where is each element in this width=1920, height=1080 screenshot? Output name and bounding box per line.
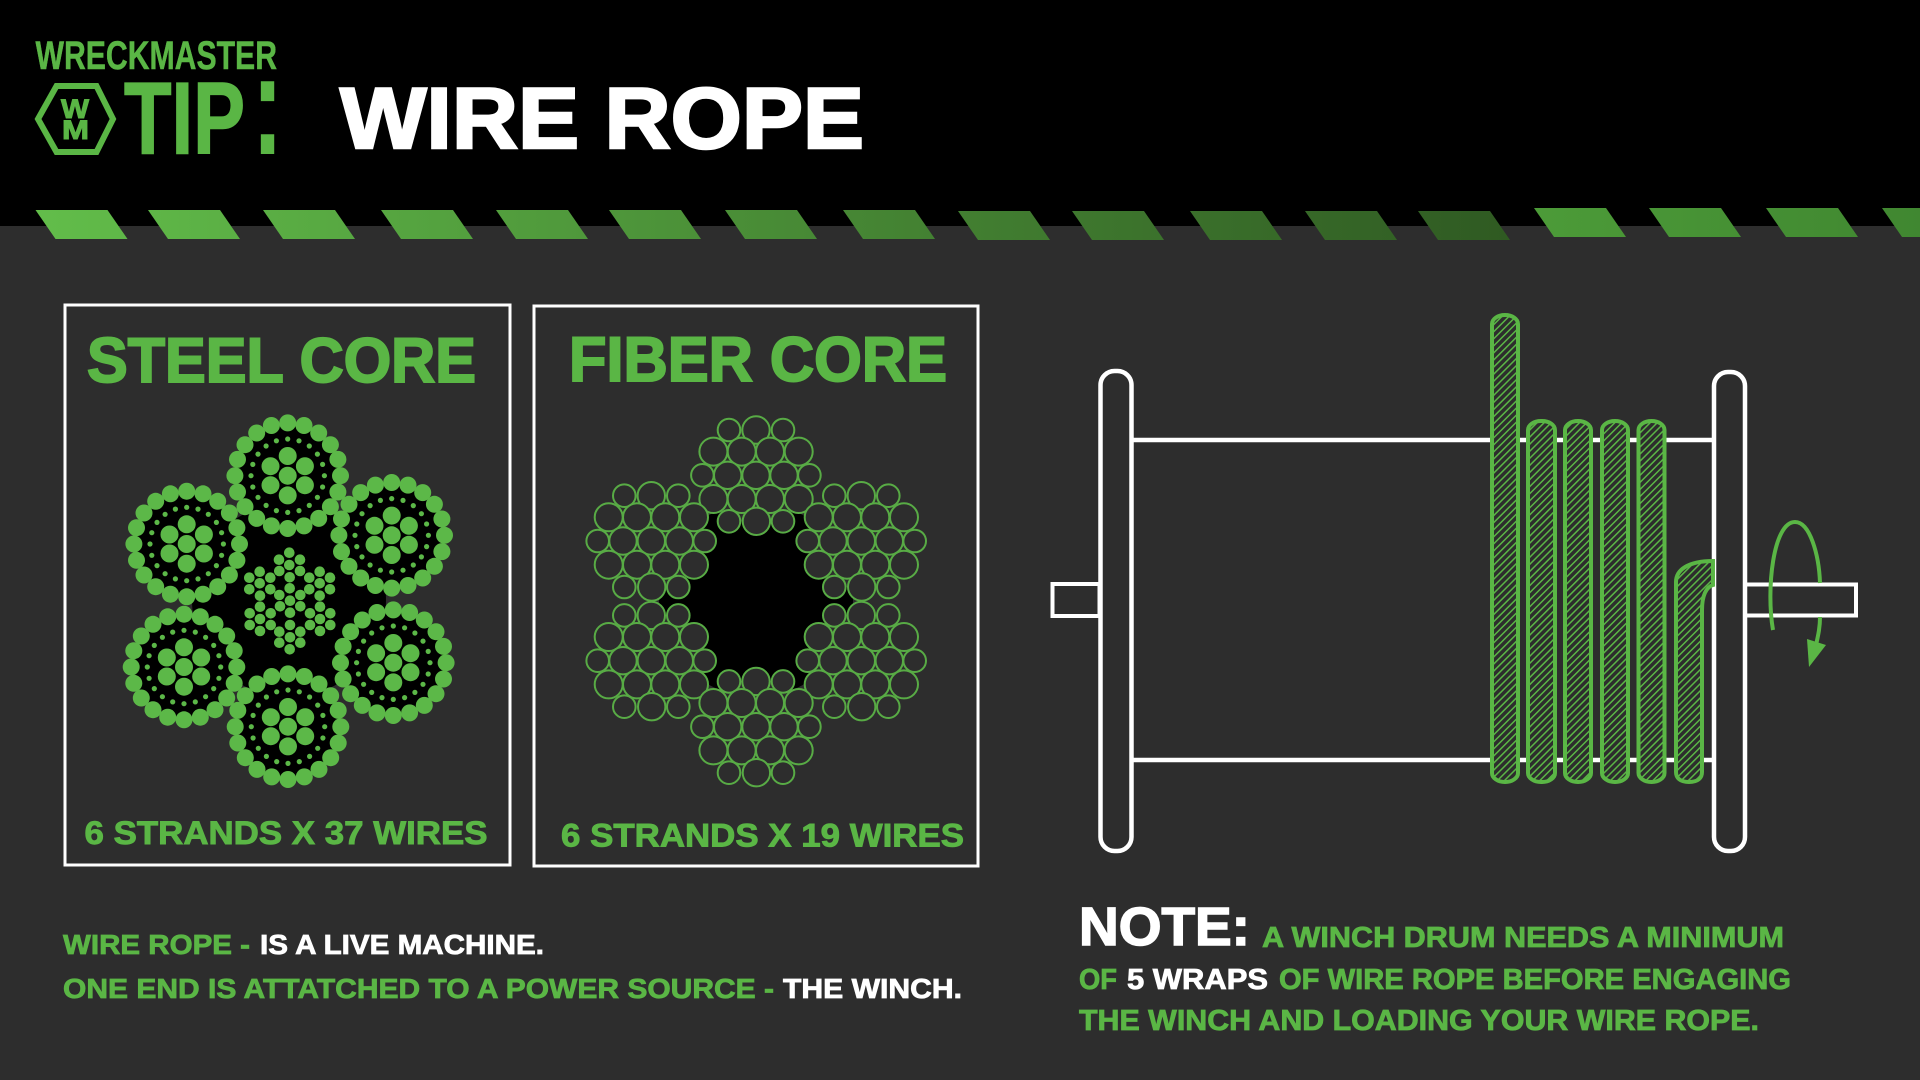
callout: note on drum wraps: OF WIRE ROPE BEFORE ENGAGING [1279, 964, 1791, 996]
WreckMaster tip logo [36, 24, 283, 185]
icon: hexagon WM badge [38, 86, 113, 152]
central steel strand [244, 547, 336, 655]
drum barrel [1133, 440, 1712, 760]
icon: hexagon WM badge: W [61, 94, 90, 124]
logo colon: : [252, 24, 283, 185]
text block: wire rope description: THE WINCH. [783, 973, 962, 1004]
text block: wire rope description: ONE END IS ATTATCHED TO A POWER SOURCE - [63, 973, 774, 1004]
right axle [1747, 584, 1856, 616]
caption: steel core: 6 STRANDS X 37 WIRES [84, 815, 488, 851]
text block: wire rope description: WIRE ROPE - [63, 929, 250, 960]
diagram: steel core cross-section [123, 414, 455, 788]
callout: note on drum wraps: A WINCH DRUM NEEDS A MINIMUM [1262, 922, 1784, 954]
caption: fiber core: 6 STRANDS X 19 WIRES [561, 818, 964, 854]
callout: note on drum wraps [1079, 897, 1791, 1037]
arrow: rotation direction [1770, 522, 1826, 667]
text block: wire rope description [63, 929, 962, 1004]
diagram: fiber core cross-section [586, 416, 926, 786]
panel: steel core [65, 305, 510, 865]
heading: fiber core: FIBER CORE [569, 325, 947, 395]
text block: wire rope description: IS A LIVE MACHINE. [260, 929, 544, 960]
panel: fiber core [534, 306, 978, 866]
callout: note on drum wraps: NOTE: [1079, 897, 1250, 957]
left axle [1052, 584, 1100, 616]
diagram: winch drum [1052, 315, 1856, 851]
rope wraps [1492, 315, 1713, 782]
callout: note on drum wraps: THE WINCH AND LOADING YOUR WIRE ROPE. [1079, 1005, 1759, 1037]
title: WIRE ROPE [340, 71, 864, 167]
callout: note on drum wraps: OF [1079, 964, 1117, 996]
logo TIP word: TIP [124, 62, 245, 176]
right flange [1714, 372, 1745, 851]
heading: steel core: STEEL CORE [87, 326, 476, 396]
logo wordmark: WRECKMASTER [36, 34, 277, 78]
icon: hexagon WM badge: M [62, 115, 89, 145]
hazard stripe divider [36, 208, 1920, 240]
header band [0, 0, 1920, 226]
left flange [1100, 371, 1132, 851]
callout: note on drum wraps: 5 WRAPS [1127, 964, 1268, 996]
